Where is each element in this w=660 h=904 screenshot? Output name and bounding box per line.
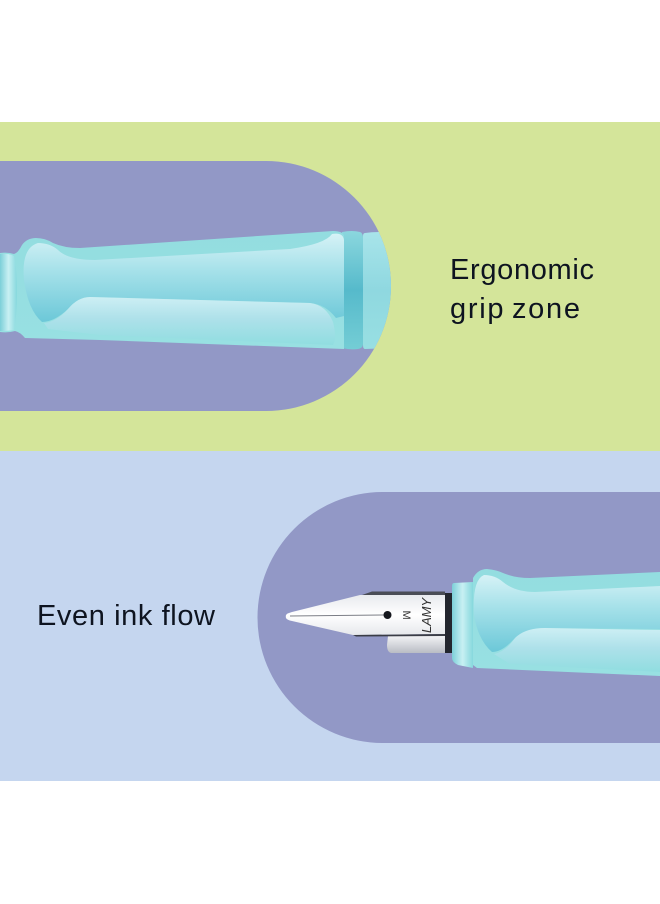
fountain pen nib illustration bbox=[286, 569, 660, 676]
purple pill: nib bbox=[258, 492, 660, 743]
panel: ergonomic grip zone bbox=[0, 122, 660, 451]
text: ergonomic grip zone bbox=[450, 254, 594, 325]
pen grip illustration bbox=[0, 231, 395, 349]
panel: even ink flow bbox=[0, 451, 660, 781]
text: ergonomic grip zone: grip zone bbox=[450, 293, 580, 325]
nib marking: LAMY: LAMY bbox=[419, 597, 434, 633]
infographic bbox=[0, 122, 660, 781]
text: even ink flow: Even ink flow bbox=[37, 600, 216, 632]
purple pill: grip bbox=[0, 161, 391, 411]
nib marking: M: M bbox=[400, 610, 412, 620]
text: ergonomic grip zone: Ergonomic bbox=[450, 254, 594, 286]
